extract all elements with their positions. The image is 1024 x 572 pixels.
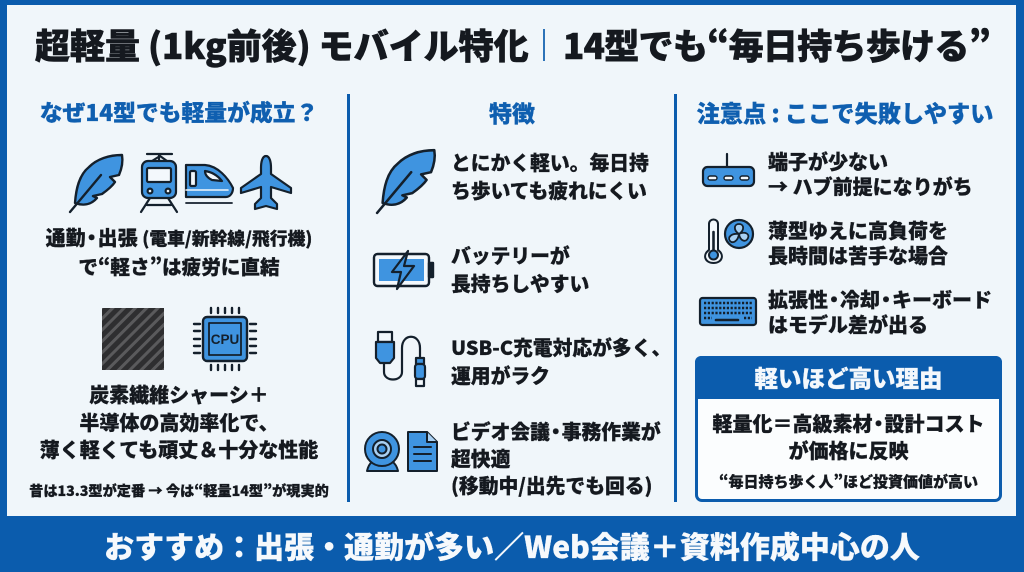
text: battery: [451, 240, 589, 297]
text: carbon and chip: 半導体の高効率化で、: [79, 406, 279, 436]
icon: cpu: CPU: [211, 332, 239, 347]
text: model differences: [768, 284, 992, 338]
icon: battery: [374, 251, 433, 289]
icon: airplane: [241, 156, 291, 209]
icon: usb cable: [376, 332, 425, 386]
callout header: [695, 356, 1002, 399]
text: carbon and chip: 薄く軽くても頑丈＆十分な性能: [40, 434, 318, 463]
divider: left: [347, 94, 350, 502]
text: carbon and chip: [40, 379, 318, 463]
text: video meetings: (移動中/出先でも回る): [451, 470, 652, 499]
panel: cautions: [696, 95, 993, 338]
text: lightweight: とにかく軽い。毎日持: [451, 147, 649, 176]
icon: ports: [703, 154, 754, 186]
title: 超軽量 (1kg前後) モバイル特化: [35, 19, 529, 70]
text: commute: で“軽さ”は疲労に直結: [78, 251, 280, 280]
text: commute: [46, 222, 312, 280]
icon: train: [141, 154, 177, 212]
text: heat: 長時間は苦手な場合: [768, 240, 948, 269]
icon: feather features: [377, 150, 435, 213]
callout body: が価格に反映: [788, 435, 908, 464]
text: model differences: 拡張性・冷却・キーボード: [768, 284, 992, 313]
heading: why light: なぜ14型でも軽量が成立？: [40, 95, 318, 128]
text: few ports: 端子が少ない: [768, 146, 888, 175]
heading: cautions: 注意点 : ここで失敗しやすい: [697, 95, 993, 129]
panel: features: [451, 95, 671, 499]
icon: carbon fiber: [102, 308, 164, 370]
heading: features: 特徴: [489, 95, 535, 129]
title: 14型でも“毎日持ち歩ける”: [563, 19, 990, 70]
bottom banner: [0, 516, 1024, 572]
text: lightweight: ち歩いても疲れにくい: [451, 174, 647, 204]
text: note: 昔は13.3型が定番 → 今は“軽量14型”が現実的: [29, 481, 329, 501]
text: few ports: [768, 146, 973, 200]
text: video meetings: ビデオ会議・事務作業が: [451, 416, 661, 445]
callout body: [712, 408, 984, 464]
icon: feather left: [70, 155, 122, 212]
text: lightweight: [451, 147, 649, 204]
text: few ports: → ハブ前提になりがち: [768, 171, 973, 200]
text: commute: 通勤・出張 (電車/新幹線/飛行機): [46, 222, 312, 251]
recommendation text: おすすめ：出張・通勤が多い／Web会議＋資料作成中心の人: [104, 523, 920, 567]
text: heat: [768, 215, 948, 269]
text: battery: 長持ちしやすい: [451, 268, 589, 297]
icon: document: [408, 432, 437, 471]
icon: keyboard: [700, 298, 756, 325]
text: video meetings: 超快適: [451, 443, 510, 472]
divider: right: [674, 94, 676, 502]
icon: bullet train: [186, 165, 233, 203]
icon: webcam: [365, 432, 399, 471]
icon: fan: [725, 220, 753, 248]
callout: why lighter costs more: [695, 356, 1002, 502]
title: [34, 19, 990, 70]
callout body: 軽量化＝高級素材・設計コスト: [712, 408, 984, 437]
text: model differences: はモデル差が出る: [768, 309, 928, 338]
icon: cpu: [194, 308, 256, 370]
text: usb-c: USB-C充電対応が多く、: [451, 332, 671, 361]
text: heat: 薄型ゆえに高負荷を: [768, 215, 948, 244]
callout header: 軽いほど高い理由: [754, 360, 942, 394]
text: battery: バッテリーが: [451, 240, 570, 269]
text: carbon and chip: 炭素繊維シャーシ＋: [89, 379, 269, 408]
text: usb-c: [451, 332, 671, 389]
text: video meetings: [451, 416, 661, 499]
panel: why light: [29, 95, 329, 501]
text: usb-c: 運用がラク: [451, 360, 550, 389]
callout note: “毎日持ち歩く人”ほど投資価値が高い: [719, 471, 978, 492]
icon: thermometer: [705, 220, 722, 263]
